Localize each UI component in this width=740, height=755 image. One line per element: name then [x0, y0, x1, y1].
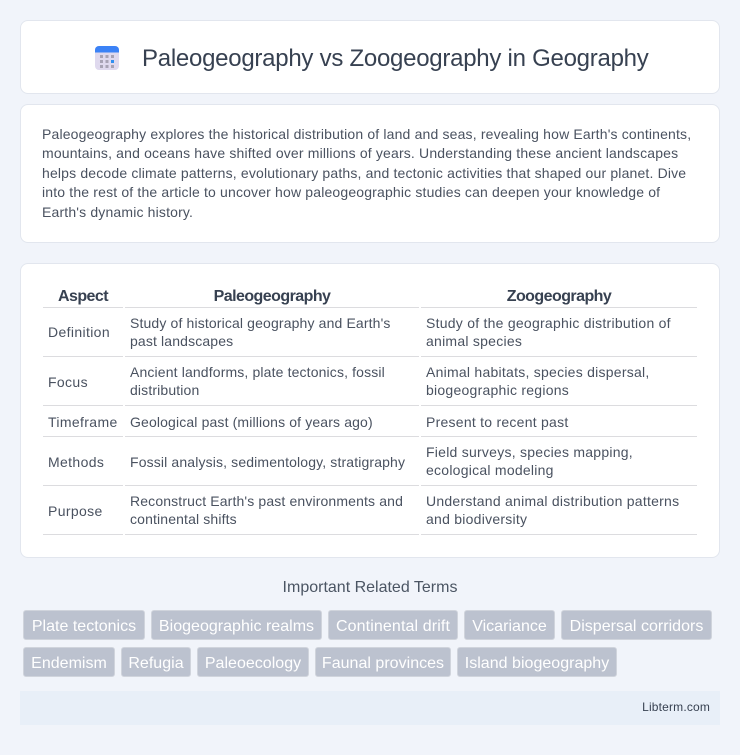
row: definition — [48, 315, 671, 349]
tags: related terms: Continental drift — [336, 618, 450, 635]
row: purpose: continental shifts — [130, 511, 237, 527]
row: methods: Fossil analysis, sedimentology, stratigraphy — [130, 454, 405, 470]
related terms heading: Important Related Terms — [283, 579, 457, 596]
intro text panel — [20, 104, 720, 243]
row: focus: distribution — [130, 382, 199, 398]
footer — [20, 691, 720, 725]
intro paragraph: mountains, and oceans have shifted over millions of years. Understanding these ancient landscapes — [42, 145, 678, 161]
icon: calendar — [95, 46, 119, 70]
table header — [58, 288, 612, 305]
row: focus: biogeographic regions — [426, 382, 569, 398]
row: definition: Study of historical geography and Earth's — [130, 315, 391, 331]
row: timeframe: Present to recent past — [426, 414, 568, 430]
tags: related terms: Biogeographic realms — [159, 618, 314, 635]
row: purpose: Purpose — [48, 503, 103, 519]
row: timeframe: Geological past (millions of years ago) — [130, 414, 373, 430]
tags: related terms — [23, 610, 712, 677]
table header: Aspect — [58, 288, 108, 305]
intro paragraph: helps decode climate patterns, evolutionary paths, and tectonic activities that shaped our planet. Dive — [42, 165, 686, 181]
row: purpose: Understand animal distribution patterns — [426, 493, 679, 509]
tags: related terms: Vicariance — [472, 618, 547, 635]
tags: related terms: Faunal provinces — [322, 655, 444, 672]
table header: Paleogeography — [214, 288, 330, 305]
row: focus — [48, 364, 650, 398]
tags: related terms: Plate tectonics — [32, 618, 136, 635]
row: focus: Animal habitats, species dispersal, — [426, 364, 650, 380]
row: definition: animal species — [426, 333, 522, 349]
tags: related terms: Refugia — [128, 655, 184, 672]
intro paragraph: Earth's dynamic history. — [42, 204, 193, 220]
intro paragraph: Paleogeography explores the historical distribution of land and seas, revealing how Earth's continents, — [42, 126, 691, 142]
tags: related terms: Endemism — [31, 655, 107, 672]
intro paragraph: into the rest of the article to uncover how paleogeographic studies can deepen your knowledge of — [42, 184, 660, 200]
intro paragraph — [42, 126, 691, 220]
row: focus: Ancient landforms, plate tectonics, fossil — [130, 364, 385, 380]
row: definition: Study of the geographic distribution of — [426, 315, 671, 331]
panel: comparison table — [20, 263, 720, 558]
tags: related terms: Dispersal corridors — [570, 618, 703, 635]
footer brand: Libterm.com — [642, 700, 710, 714]
tags: related terms: Paleoecology — [205, 655, 301, 672]
row: definition: past landscapes — [130, 333, 233, 349]
row: timeframe: Timeframe — [48, 414, 118, 430]
row: methods: Field surveys, species mapping, — [426, 444, 633, 460]
table header: Zoogeography — [507, 288, 611, 305]
row: methods: Methods — [48, 454, 104, 470]
row: timeframe — [48, 414, 568, 430]
title: Paleogeography vs Zoogeography in Geography — [142, 45, 649, 72]
row: focus: Focus — [48, 374, 88, 390]
row: methods: ecological modeling — [426, 462, 554, 478]
row: purpose — [48, 493, 679, 527]
row: definition: Definition — [48, 324, 110, 340]
row: purpose: Reconstruct Earth's past environments and — [130, 493, 403, 509]
tags: related terms: Island biogeography — [465, 655, 609, 672]
header card — [20, 20, 720, 94]
row: methods — [48, 444, 633, 478]
row: purpose: and biodiversity — [426, 511, 527, 527]
